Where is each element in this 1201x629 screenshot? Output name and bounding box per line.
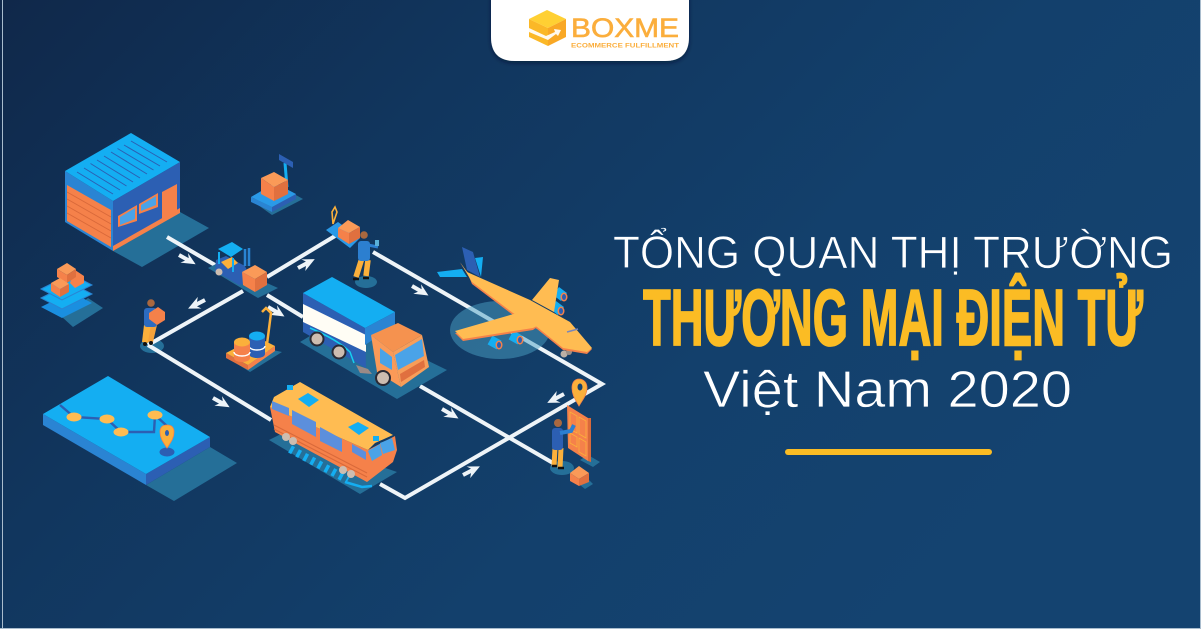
pallet stack with crates <box>41 263 103 327</box>
brand name: BOXME <box>571 13 679 43</box>
airplane <box>437 247 592 359</box>
tagline: ECOMMERCE FULFILLMENT <box>571 42 679 50</box>
warehouse <box>65 133 180 251</box>
icon: Boxme box <box>529 10 566 46</box>
cart with barrels <box>226 308 282 372</box>
underline <box>785 449 992 455</box>
train <box>269 382 397 494</box>
heading line 3: Việt Nam 2020 <box>703 361 1072 419</box>
delivery door with customer <box>552 379 600 489</box>
heading line 1: TỔNG QUAN THỊ TRƯỜNG <box>613 227 1173 278</box>
logo panel: Boxme <box>491 0 689 61</box>
scale with crate <box>251 154 303 215</box>
route network lines <box>148 236 602 498</box>
truck <box>300 277 447 399</box>
title block <box>613 227 1173 455</box>
person carrying box <box>142 299 165 346</box>
ground shadows under lines <box>113 212 574 475</box>
worker with tablet and crate cart <box>326 207 379 279</box>
map with route <box>43 376 237 501</box>
forklift with crate <box>208 242 278 298</box>
route arrows <box>176 250 567 480</box>
